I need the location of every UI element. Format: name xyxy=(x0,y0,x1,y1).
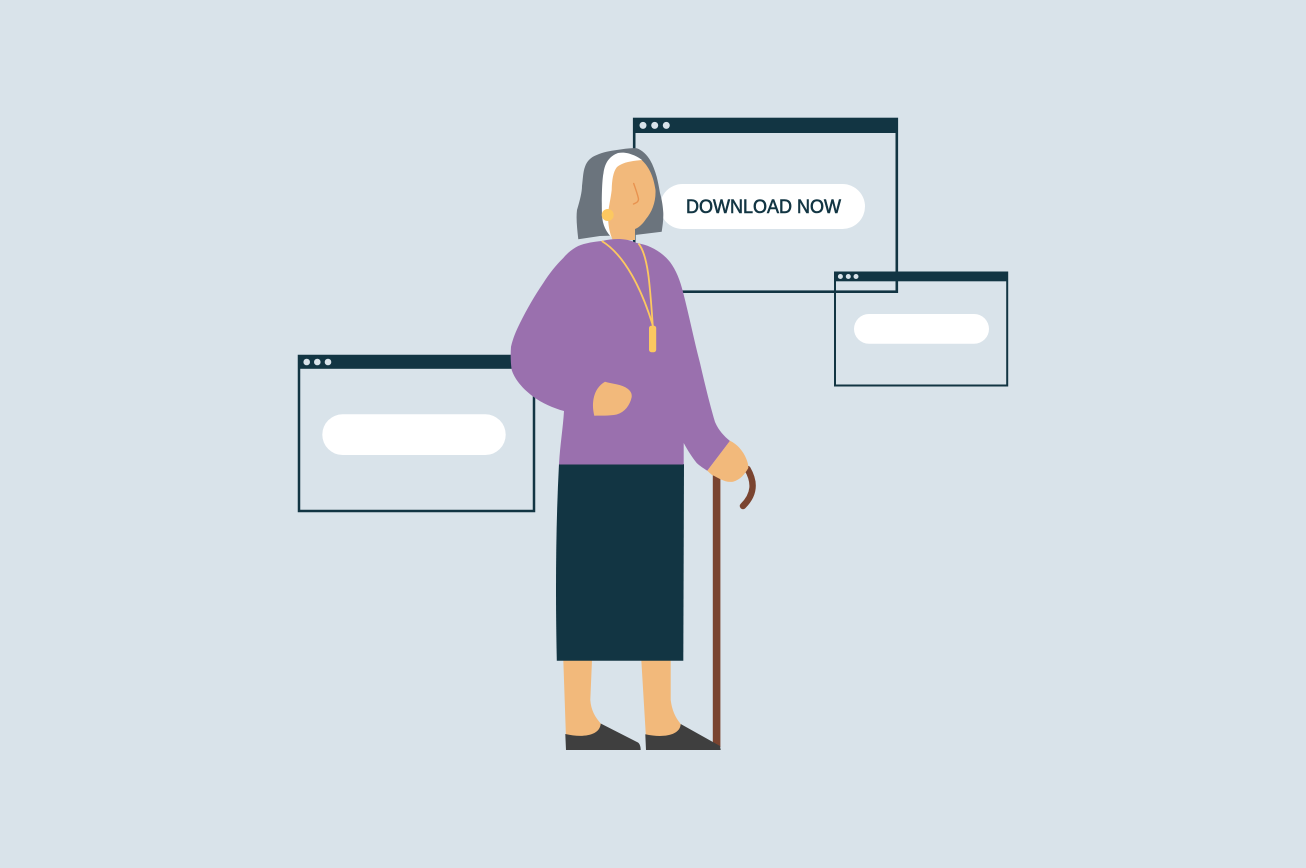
button: download now xyxy=(660,184,865,229)
face and neck xyxy=(608,160,656,240)
nose line xyxy=(634,184,638,204)
skirt xyxy=(556,464,684,661)
sweater xyxy=(511,239,730,471)
blank button xyxy=(854,314,989,344)
legs xyxy=(563,660,681,738)
hand on cane xyxy=(707,441,748,482)
figure: older woman xyxy=(511,148,753,750)
hair xyxy=(577,148,663,239)
panel: small browser window xyxy=(834,272,1008,386)
panel: left browser window xyxy=(298,355,535,511)
necklace xyxy=(602,241,656,352)
earring xyxy=(602,209,614,221)
panel: large browser window with download button xyxy=(633,118,898,292)
blank button xyxy=(322,414,506,455)
white hair streak xyxy=(602,153,642,239)
shoes xyxy=(565,724,721,750)
button: download now: DOWNLOAD NOW xyxy=(686,197,841,218)
hand in pocket xyxy=(593,382,632,416)
cane xyxy=(713,469,753,747)
